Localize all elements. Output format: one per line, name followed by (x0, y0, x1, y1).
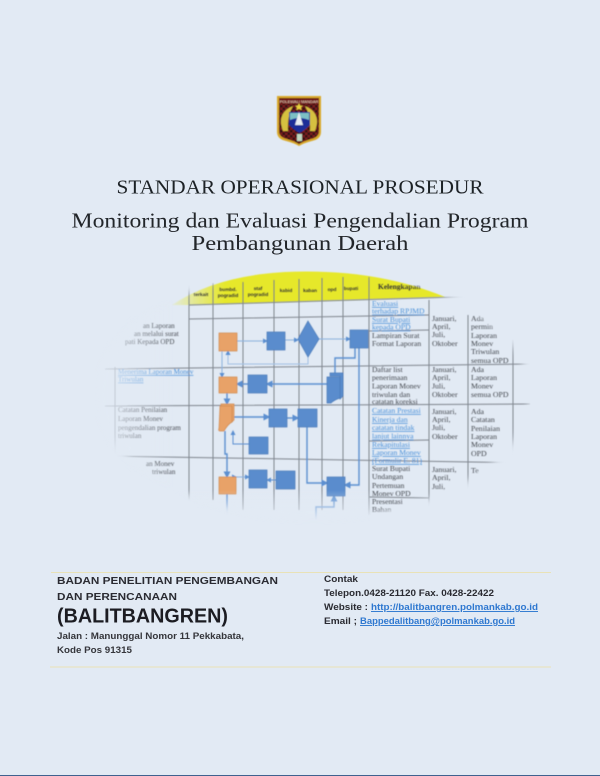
footer: contact block: Contak (324, 574, 359, 585)
completeness column text: Surat Bupati (372, 315, 410, 324)
result column text: Penilaian (471, 424, 500, 433)
footer: agency block: BADAN PENELITIAN PENGEMBANGAN (57, 575, 278, 587)
period column text: Juli, (432, 382, 445, 390)
result column text: semua OPD (471, 356, 509, 365)
completeness column text: penerimaan (372, 373, 408, 382)
table header band (172, 272, 445, 305)
completeness column text: Format Laporan (372, 339, 421, 348)
orange process boxes (219, 333, 237, 494)
completeness column text: Laporan Monev (372, 382, 421, 390)
period column text: April, (432, 322, 450, 331)
blue process boxes (248, 321, 368, 496)
header labels: pogradid (248, 292, 268, 298)
footer rule top (51, 572, 551, 573)
completeness column text: catatan koreksi (372, 397, 418, 406)
result column text: Ada (471, 407, 485, 416)
completeness column text: triwulan dan (372, 390, 410, 399)
activity column text: triwulan (118, 432, 142, 440)
result column text: Monev (471, 440, 493, 449)
subtitle: Monitoring dan Evaluasi Pengendalian Program (72, 208, 528, 232)
activity column text (118, 322, 194, 476)
period column text: Juli, (432, 423, 445, 432)
completeness column text: Surat Bupati (372, 464, 410, 473)
footer: contact block (324, 574, 538, 627)
completeness column text: Lampiran Surat (372, 331, 420, 340)
completeness column text: kepada OPD (372, 322, 411, 332)
completeness column text: Laporan Monev (372, 448, 421, 457)
result column text: Laporan (471, 432, 497, 441)
activity column text: an melalui surat (134, 330, 179, 338)
period column text: April, (432, 415, 450, 424)
completeness column text: (Formulir E. 81) (372, 456, 422, 465)
period column text: Oktober (432, 432, 458, 441)
completeness column text: Monev OPD (372, 489, 411, 498)
activity column text: triwulan (152, 468, 176, 476)
activity column text: Menerima Laporan Monev (118, 368, 194, 376)
completeness column text: catatan tindak (372, 423, 415, 432)
result column text: Ada (471, 365, 485, 374)
footer: contact block: Email ; (324, 616, 357, 627)
header labels: opd (328, 287, 336, 293)
header labels: Kelengkapan (378, 282, 421, 291)
result column text: Te (471, 466, 479, 475)
result column text: semua OPD (471, 390, 509, 399)
result column text (471, 314, 509, 475)
footer: agency block (57, 575, 278, 655)
period column text: Januari, (432, 407, 457, 416)
completeness column text: Pertemuan (372, 481, 405, 490)
period column text: April, (432, 473, 450, 482)
footer: agency block: Kode Pos 91315 (57, 645, 132, 655)
icon: regional emblem (277, 96, 321, 146)
flow connectors (222, 339, 359, 520)
completeness column text: Bahan (372, 505, 392, 514)
footer rule bottom (50, 666, 551, 668)
header labels (194, 282, 421, 299)
activity column text: an Monev (146, 460, 175, 468)
flowchart image in oval vignette (95, 272, 530, 525)
activity column text: pengendalian program (118, 424, 181, 432)
completeness column text: Kinerja dan (372, 415, 408, 424)
footer: contact block: Website : (324, 602, 368, 613)
result column text: permin (471, 322, 493, 331)
period column text: Januari, (432, 314, 457, 323)
completeness column text: Catatan Prestasi (372, 406, 421, 415)
period column text (432, 314, 458, 491)
completeness column text: Undangan (372, 472, 403, 481)
activity column text: Laporan Monev (118, 415, 163, 423)
header labels: kaban (303, 288, 317, 294)
completeness column text (372, 299, 425, 514)
activity column text: Catatan Penilaian (118, 406, 168, 414)
header labels: terkait (194, 292, 209, 298)
header labels: kabid (280, 288, 292, 294)
completeness column text: Evaluasi (372, 299, 398, 308)
result column text: OPD (471, 449, 487, 458)
activity column text: Triwulan (118, 376, 144, 384)
period column text: April, (432, 373, 450, 382)
table grid (105, 277, 530, 515)
activity column text: pati Kepada OPD (125, 338, 174, 346)
footer: contact block: Bappedalitbang@polmankab.go.id (360, 616, 515, 627)
footer: agency block: DAN PERENCANAAN (57, 591, 177, 603)
footer: agency block: Jalan : Manunggal Nomor 11 Pekkabata, (57, 631, 244, 641)
header labels: bupati (344, 286, 358, 292)
footer: agency block: (BALITBANGREN) (57, 606, 228, 628)
period column text: Juli, (432, 330, 445, 339)
subtitle (72, 208, 528, 255)
title: STANDAR OPERASIONAL PROSEDUR (116, 176, 484, 198)
completeness column text: terhadap RPJMD (372, 306, 425, 316)
subtitle: Pembangunan Daerah (192, 231, 409, 255)
result column text: Laporan (471, 373, 497, 382)
result column text: Triwulan (471, 347, 499, 356)
header labels: bumbd. (219, 287, 237, 293)
period column text: Januari, (432, 465, 457, 474)
footer: contact block: http://balitbangren.polmankab.go.id (371, 602, 538, 613)
result column text: Monev (471, 339, 493, 348)
period column text: Januari, (432, 365, 457, 374)
footer: contact block: Telepon.0428-21120 Fax. 0428-22422 (324, 588, 494, 599)
result column text: Ada (471, 314, 485, 323)
completeness column text: Daftar list (372, 365, 403, 374)
result column text: Laporan (471, 331, 497, 340)
icon: regional emblem: POLEWALI MANDAR (280, 99, 318, 104)
completeness column text: lanjut lainnya (372, 432, 414, 440)
result column text: Monev (471, 382, 493, 390)
period column text: Oktober (432, 339, 458, 348)
completeness column text: Rekapitulasi (372, 440, 410, 449)
period column text: Juli, (432, 482, 445, 491)
header labels: pogradid (218, 293, 238, 299)
period column text: Oktober (432, 390, 458, 399)
activity column text: an Laporan (143, 322, 175, 330)
result column text: Catatan (471, 415, 495, 424)
completeness column text: Presentasi (372, 497, 403, 506)
header labels: staf (254, 286, 263, 292)
